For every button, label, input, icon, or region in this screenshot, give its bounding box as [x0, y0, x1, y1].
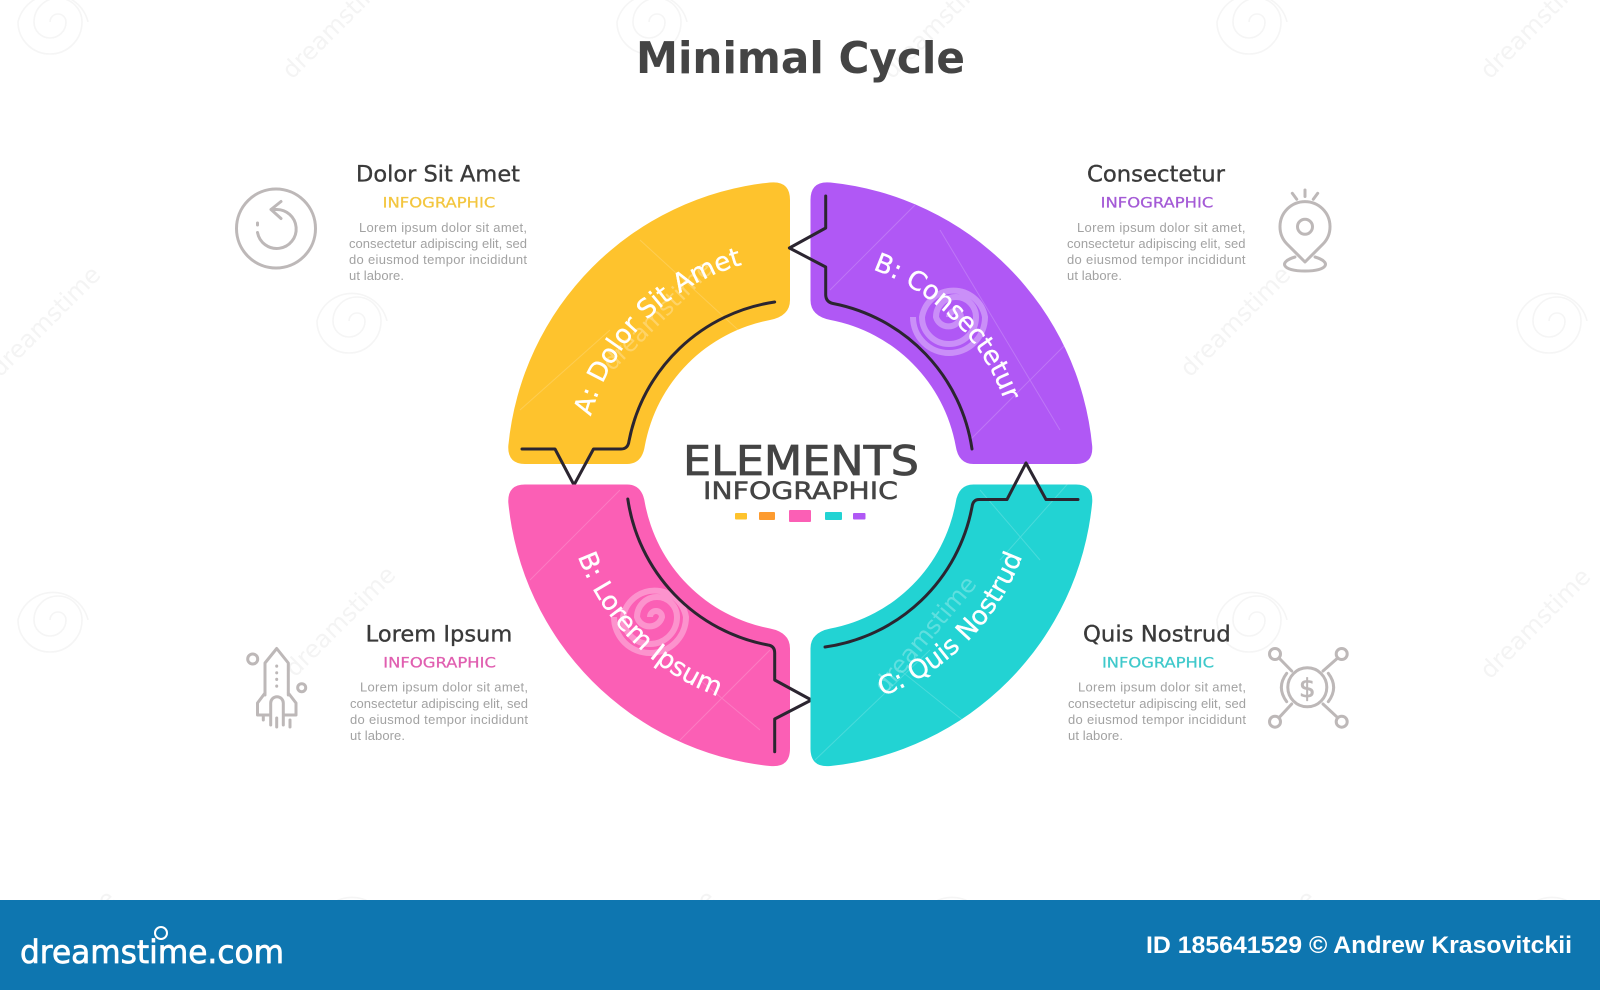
text block: Quis Nostrud [1068, 623, 1246, 743]
text block: Lorem Ipsum: ut labore. [350, 728, 405, 743]
center label [683, 437, 919, 522]
text block: Lorem Ipsum: consectetur adipiscing elit, sed [350, 696, 528, 711]
text block: Consectetur [1067, 163, 1246, 283]
icon: dollar network: $ [1299, 674, 1316, 704]
icon: dollar network [1270, 648, 1347, 727]
panel: yellow segment [508, 182, 790, 484]
title: Minimal Cycle [636, 33, 965, 84]
image credit: ID 185641529 © Andrew Krasovitckii [1146, 932, 1572, 959]
watermark pattern: dreamstime [279, 561, 401, 682]
text block: Lorem Ipsum: INFOGRAPHIC [383, 655, 496, 671]
text block: Dolor Sit Amet: INFOGRAPHIC [383, 195, 496, 211]
panel: cyan segment: C: Quis Nostrud [878, 550, 1022, 694]
text block: Dolor Sit Amet [349, 163, 527, 283]
panel: purple segment: B: Consectetur [874, 252, 1018, 398]
watermark pattern: dreamstime [1174, 261, 1296, 382]
text block: Dolor Sit Amet: do eiusmod tempor incididunt [349, 252, 527, 267]
panel: cyan segment: dreamstime [868, 570, 982, 699]
icon: rocket [248, 648, 306, 727]
logo: dreamstime.com [20, 933, 284, 971]
text block: Consectetur: INFOGRAPHIC [1101, 195, 1214, 211]
text block: Dolor Sit Amet: Lorem ipsum dolor sit amet, [359, 220, 527, 235]
icon: map pin [1280, 190, 1330, 271]
panel: pink segment [508, 484, 810, 766]
text block: Consectetur: do eiusmod tempor incididunt [1067, 252, 1246, 267]
panel: pink segment: B: Lorem Ipsum [578, 551, 720, 696]
center label: ELEMENTS [683, 437, 919, 485]
text block: Quis Nostrud: Quis Nostrud [1083, 623, 1231, 648]
panel: yellow segment: A: Dolor Sit Amet [574, 248, 742, 416]
text block: Lorem Ipsum [350, 623, 528, 743]
footer bar [0, 900, 1600, 990]
center label: INFOGRAPHIC [703, 477, 898, 505]
panel: yellow segment: dreamstime [596, 255, 718, 376]
text block: Lorem Ipsum: Lorem ipsum dolor sit amet, [360, 680, 528, 695]
text block: Quis Nostrud: ut labore. [1068, 728, 1123, 743]
text block: Dolor Sit Amet: consectetur adipiscing elit, sed [349, 236, 527, 251]
icon: circular arrow [236, 189, 316, 268]
text block: Consectetur: Lorem ipsum dolor sit amet, [1077, 220, 1246, 235]
text block: Quis Nostrud: consectetur adipiscing elit, sed [1068, 696, 1246, 711]
text block: Quis Nostrud: do eiusmod tempor incididunt [1068, 712, 1246, 727]
panel: cyan segment [810, 461, 1092, 766]
watermark pattern: dreamstime [1474, 563, 1596, 684]
panel: purple segment [788, 182, 1092, 464]
text block: Lorem Ipsum: do eiusmod tempor incididunt [350, 712, 528, 727]
text block: Consectetur: ut labore. [1067, 268, 1122, 283]
text block: Consectetur: consectetur adipiscing elit, sed [1067, 236, 1246, 251]
text block: Quis Nostrud: Lorem ipsum dolor sit amet, [1078, 680, 1246, 695]
text block: Consectetur: Consectetur [1087, 163, 1226, 188]
text block: Dolor Sit Amet: ut labore. [349, 268, 404, 283]
text block: Dolor Sit Amet: Dolor Sit Amet [356, 163, 520, 188]
text block: Lorem Ipsum: Lorem Ipsum [366, 623, 512, 648]
text block: Quis Nostrud: INFOGRAPHIC [1102, 655, 1214, 671]
